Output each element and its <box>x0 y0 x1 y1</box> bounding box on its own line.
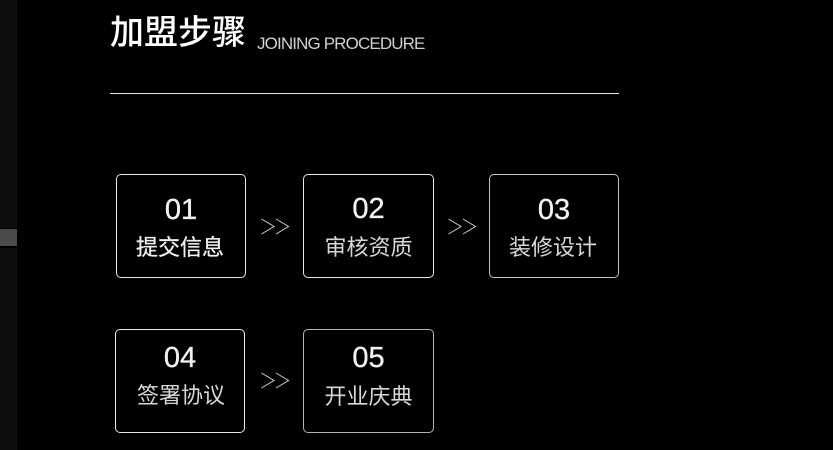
title: 加盟步骤 <box>110 14 246 52</box>
step 01 card <box>116 174 246 278</box>
left background photo strip <box>0 0 17 450</box>
grey band in photo strip <box>0 229 17 246</box>
step 03 card <box>489 174 619 278</box>
step 05 card <box>303 329 434 433</box>
step 04 card <box>115 329 245 433</box>
arrow 2 <box>448 218 476 234</box>
step 05 label: 开业庆典 <box>324 384 412 409</box>
step 01 number: 01 <box>165 194 197 226</box>
step 02 number: 02 <box>352 193 385 225</box>
step 02 label: 审核资质 <box>324 235 412 260</box>
step 03 number: 03 <box>538 194 570 226</box>
subtitle: JOINING PROCEDURE <box>257 34 425 53</box>
step 04 number: 04 <box>164 342 196 374</box>
step 01 label: 提交信息 <box>136 235 224 260</box>
step 02 card <box>303 174 434 278</box>
step 03 label: 装修设计 <box>509 235 597 260</box>
arrow 3 <box>261 372 290 388</box>
arrow 1 <box>261 218 290 234</box>
step 04 label: 签署协议 <box>137 383 225 408</box>
step 05 number: 05 <box>352 342 385 374</box>
title divider <box>110 93 619 94</box>
